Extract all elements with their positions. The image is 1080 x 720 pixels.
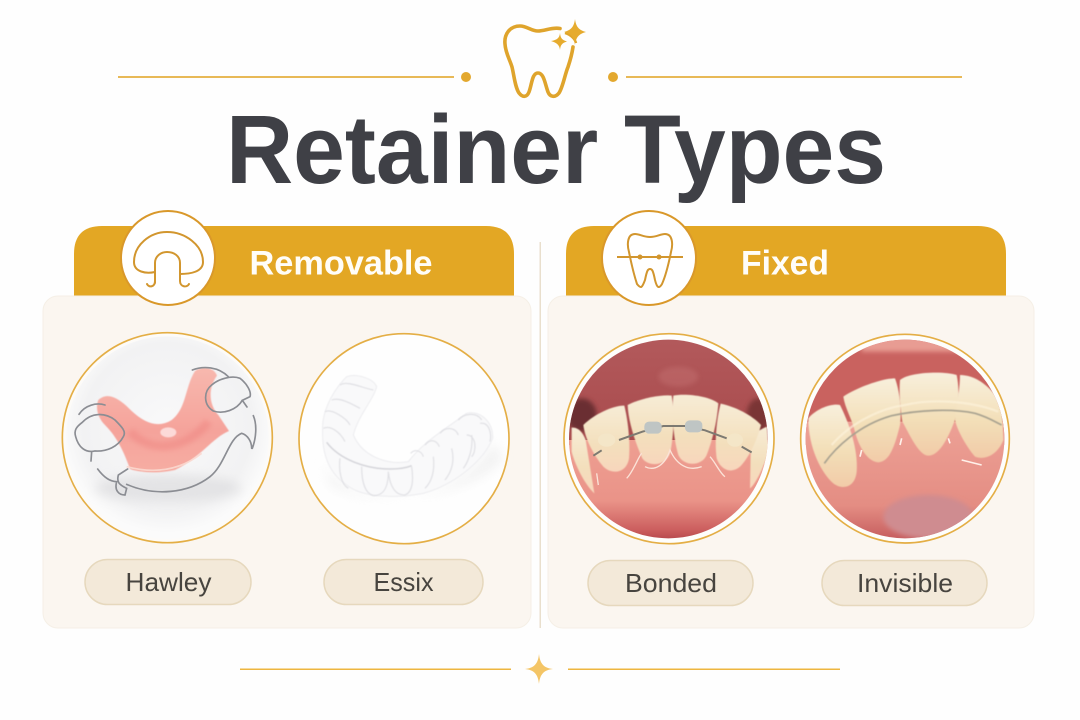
heading: fixed: Fixed <box>741 244 829 282</box>
header bar: removable <box>74 226 514 296</box>
center divider <box>540 242 541 628</box>
pill label: Invisible <box>822 560 987 606</box>
icon: sparkling tooth <box>505 19 586 96</box>
pill label: Invisible: Invisible <box>857 568 953 598</box>
card: removable <box>43 296 531 628</box>
image: Essix retainer <box>299 334 509 544</box>
image: Invisible retainer <box>801 334 1012 543</box>
pill label: Essix: Essix <box>374 567 434 597</box>
top ornament: lines and dots <box>118 72 962 82</box>
icon: removable retainer arch <box>121 211 215 305</box>
image: Hawley retainer <box>62 333 272 543</box>
pill label: Essix <box>324 560 483 604</box>
pill label: Hawley: Hawley <box>126 567 212 597</box>
title: Retainer Types <box>226 95 886 204</box>
heading: removable: Removable <box>250 244 432 282</box>
pill label: Bonded <box>588 560 753 606</box>
image: Bonded retainer <box>564 334 774 544</box>
panel: removable <box>43 211 531 628</box>
card: fixed <box>548 296 1034 628</box>
pill label: Hawley <box>85 560 251 604</box>
header bar: fixed <box>566 226 1006 296</box>
panel: fixed <box>548 211 1034 628</box>
bottom ornament: lines and star <box>240 654 840 684</box>
pill label: Bonded: Bonded <box>625 568 717 598</box>
icon: tooth with wire <box>602 211 696 305</box>
